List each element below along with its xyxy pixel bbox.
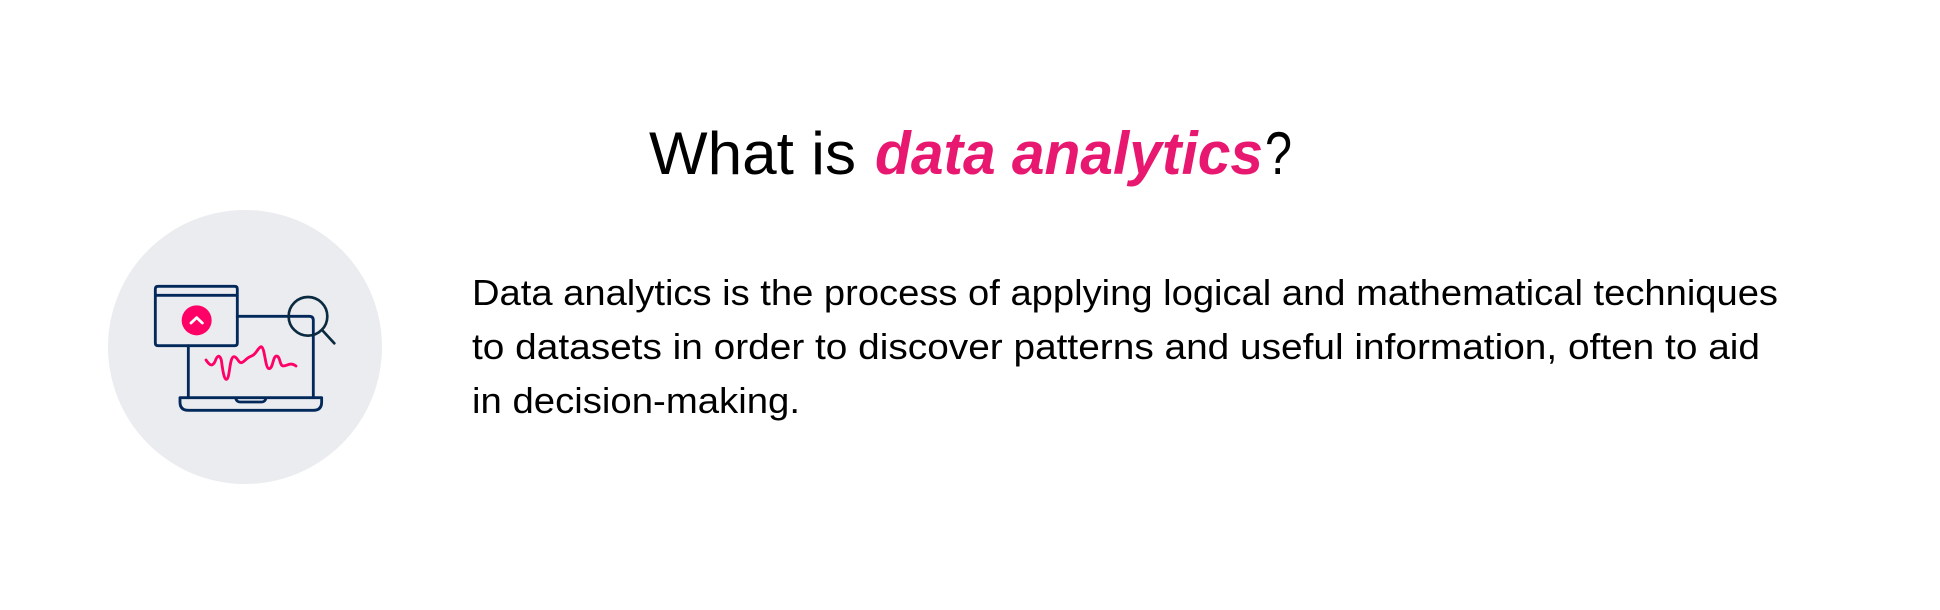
laptop base [180,398,322,410]
title: ? [1265,120,1292,187]
body text [472,272,1778,421]
pink data wave [206,347,296,379]
laptop screen outline [188,316,313,398]
title [649,120,1292,187]
icon: laptop, window and magnifier [155,286,334,410]
browser window [155,286,237,346]
icon: data analytics laptop in circle [108,210,382,484]
body text: in decision-making. [472,380,800,421]
title: data analytics [875,120,1263,187]
icon background circle [108,210,382,484]
pink badge with chevron [182,305,212,335]
magnifying glass [289,297,334,343]
body text: to datasets in order to discover patterns and useful information, often to aid [472,326,1760,367]
body text: Data analytics is the process of applying logical and mathematical techniques [472,272,1778,313]
title: What is [649,120,856,187]
